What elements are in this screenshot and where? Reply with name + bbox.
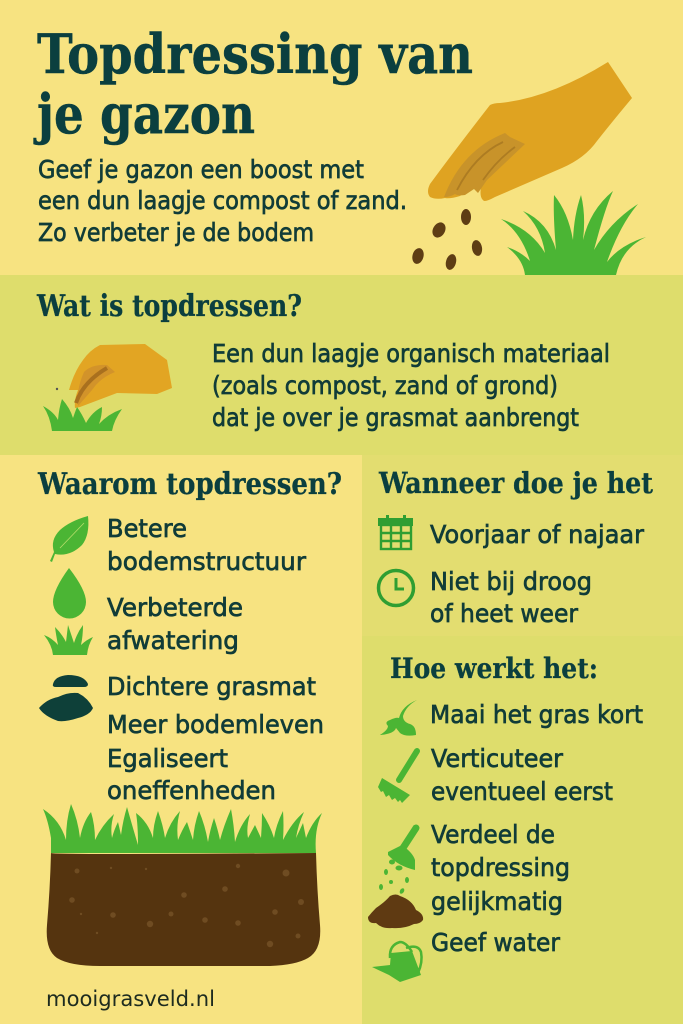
text: wat is topdressen: Een dun laagje organisch materiaal [212, 339, 610, 368]
icon: calendar [378, 515, 413, 549]
list: hoe werkt het: gelijkmatig [431, 887, 563, 916]
list: wanneer: Niet bij droog [430, 567, 592, 596]
list: hoe werkt het: Maai het gras kort [430, 700, 643, 729]
list: waarom topdressen: bodemstructuur [107, 547, 307, 576]
list: waarom topdressen: afwatering [107, 626, 239, 655]
icon: rake [378, 751, 417, 803]
icon: hand scattering compost [428, 62, 632, 201]
list: waarom topdressen [107, 514, 324, 805]
list: waarom topdressen: Dichtere grasmat [107, 672, 316, 701]
icon: watering can [372, 942, 422, 982]
list: hoe werkt het: Verticuteer [431, 744, 564, 773]
list: hoe werkt het: eventueel eerst [431, 777, 613, 806]
subtitle: Zo verbeter je de bodem [38, 218, 314, 247]
title: je gazon [33, 82, 255, 146]
panel: wat is topdressen [0, 275, 683, 455]
panel: hoe werkt het [362, 636, 683, 1024]
footer url: mooigrasveld.nl [46, 987, 215, 1011]
illustration: soil with grass [43, 804, 322, 966]
text: wat is topdressen: (zoals compost, zand of grond) [212, 371, 558, 400]
icon: soil pile [368, 894, 423, 928]
icon: grass tuft [501, 191, 646, 275]
heading: wat is topdressen: Wat is topdressen? [36, 289, 302, 324]
icon: leaf [50, 516, 88, 562]
list: hoe werkt het: Geef water [431, 928, 561, 957]
list: waarom topdressen: Meer bodemleven [107, 710, 324, 739]
text: wat is topdressen [212, 339, 610, 432]
list: wanneer: Voorjaar of najaar [430, 520, 645, 549]
list: wanneer [430, 520, 645, 628]
icon: stones [39, 675, 93, 721]
panel: wanneer doe je het [362, 455, 683, 636]
icon: clock [378, 570, 414, 606]
icon: water drop [53, 568, 86, 618]
text: wat is topdressen: dat je over je grasmat aanbrengt [212, 403, 579, 432]
subtitle: Geef je gazon een boost met [38, 155, 364, 184]
list: waarom topdressen: Verbeterde [107, 593, 243, 622]
icon: shovel with dots [379, 828, 416, 895]
heading: waarom topdressen: Waarom topdressen? [37, 467, 342, 502]
list: wanneer: of heet weer [430, 599, 579, 628]
subtitle: een dun laagje compost of zand. [38, 186, 407, 215]
title [33, 22, 473, 146]
list: waarom topdressen: oneffenheden [107, 776, 276, 805]
icon: small hand with grass [43, 344, 172, 431]
list: hoe werkt het [430, 700, 643, 957]
icon: falling seeds [411, 209, 483, 271]
title: Topdressing van [37, 22, 473, 86]
list: waarom topdressen: Egaliseert [107, 744, 228, 773]
list: waarom topdressen: Betere [107, 514, 187, 543]
subtitle [38, 155, 407, 247]
heading: hoe werkt het: Hoe werkt het: [390, 652, 598, 685]
icon: small grass [44, 625, 93, 655]
icon: mower [380, 700, 417, 736]
list: hoe werkt het: topdressing [431, 853, 570, 882]
list: hoe werkt het: Verdeel de [431, 820, 555, 849]
